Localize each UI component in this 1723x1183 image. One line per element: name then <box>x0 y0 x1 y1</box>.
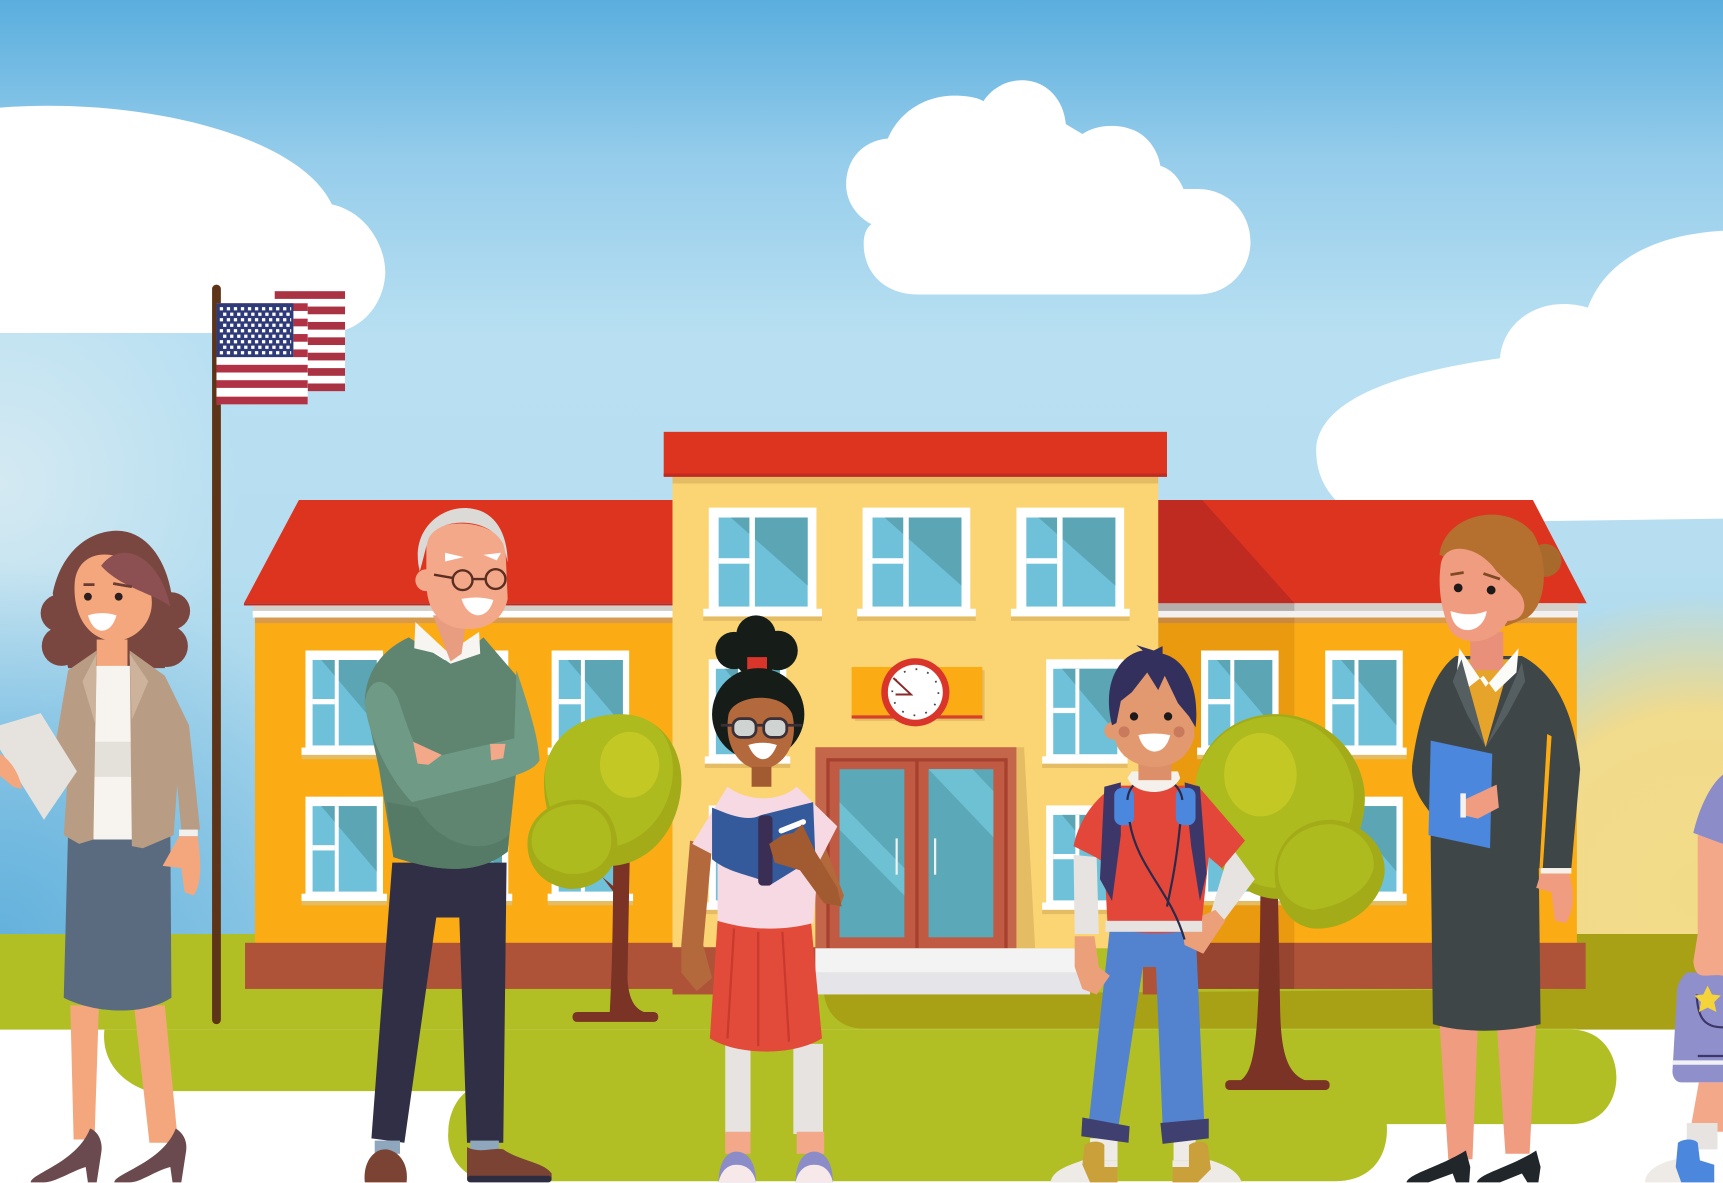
flagpole and American flag <box>212 285 345 1024</box>
socks and legs <box>725 1044 751 1134</box>
neck and blouse <box>97 640 127 672</box>
head <box>1104 722 1122 740</box>
person: female teacher, left <box>0 531 200 1182</box>
shirt <box>692 787 837 929</box>
shirt <box>1693 775 1723 844</box>
face <box>728 698 794 769</box>
arm gap <box>1539 734 1552 868</box>
paper <box>0 713 77 820</box>
ground: lawn and white path <box>0 934 1723 1183</box>
sky background <box>0 0 1723 945</box>
shoe <box>1645 1159 1714 1182</box>
head <box>1529 544 1561 577</box>
folder <box>1429 741 1492 848</box>
arms crossed <box>365 670 540 802</box>
neck and collar <box>1127 771 1180 792</box>
shoes <box>719 1152 833 1182</box>
windows: left wing <box>302 651 633 905</box>
school entrance doors and steps <box>815 747 1090 994</box>
jacket <box>55 651 179 848</box>
tree: right <box>1195 714 1385 1090</box>
arm left <box>1074 855 1099 934</box>
person: child at right edge with backpack <box>1645 775 1723 1182</box>
cloud: center <box>846 80 1250 294</box>
socks <box>1090 1138 1118 1160</box>
cloud: left <box>0 106 385 333</box>
shoes <box>1407 1150 1541 1182</box>
shoes <box>365 1149 407 1182</box>
person: female principal, right <box>1407 515 1580 1182</box>
arms <box>681 841 712 991</box>
leg <box>1690 1082 1723 1132</box>
person: girl with book <box>681 615 844 1182</box>
legs <box>70 1005 178 1143</box>
backpack straps <box>1100 782 1207 901</box>
clock sign <box>852 658 985 726</box>
person: boy with headphones <box>1051 645 1255 1182</box>
headphones <box>1114 788 1134 825</box>
windows: upper central row <box>703 508 1130 621</box>
hair <box>41 531 190 668</box>
arm <box>1698 835 1723 967</box>
collar <box>414 622 480 664</box>
backpack <box>1672 972 1723 1082</box>
head <box>415 569 437 591</box>
school: right wing <box>1158 500 1587 989</box>
cuff and hand <box>179 830 198 836</box>
hand <box>1464 785 1499 819</box>
legs <box>1439 1022 1536 1159</box>
bun and hair <box>715 632 753 669</box>
jacket <box>1412 656 1580 868</box>
shoes <box>1051 1160 1242 1182</box>
skirt <box>1431 835 1541 1031</box>
legs <box>1089 929 1204 1125</box>
school: central block <box>664 432 1167 994</box>
wrist and right hand <box>1541 868 1571 874</box>
blouse <box>1458 659 1511 747</box>
cloud: right <box>1316 231 1723 523</box>
tree: left <box>527 714 681 1022</box>
school: left wing <box>244 500 672 989</box>
book <box>712 802 815 886</box>
skirt <box>710 921 822 1052</box>
upper arm right <box>819 830 844 908</box>
windows: right wing <box>1197 651 1407 905</box>
legs <box>371 863 507 1143</box>
face <box>75 555 152 641</box>
arm right <box>1211 846 1255 923</box>
windows: central lower rows <box>705 659 1128 914</box>
glasses <box>434 569 505 590</box>
skirt <box>64 830 171 1011</box>
sweater <box>365 637 516 869</box>
shoes <box>31 1128 186 1182</box>
person: older male teacher <box>365 508 552 1182</box>
shirt <box>1074 786 1245 933</box>
hand and forearm <box>769 824 842 907</box>
